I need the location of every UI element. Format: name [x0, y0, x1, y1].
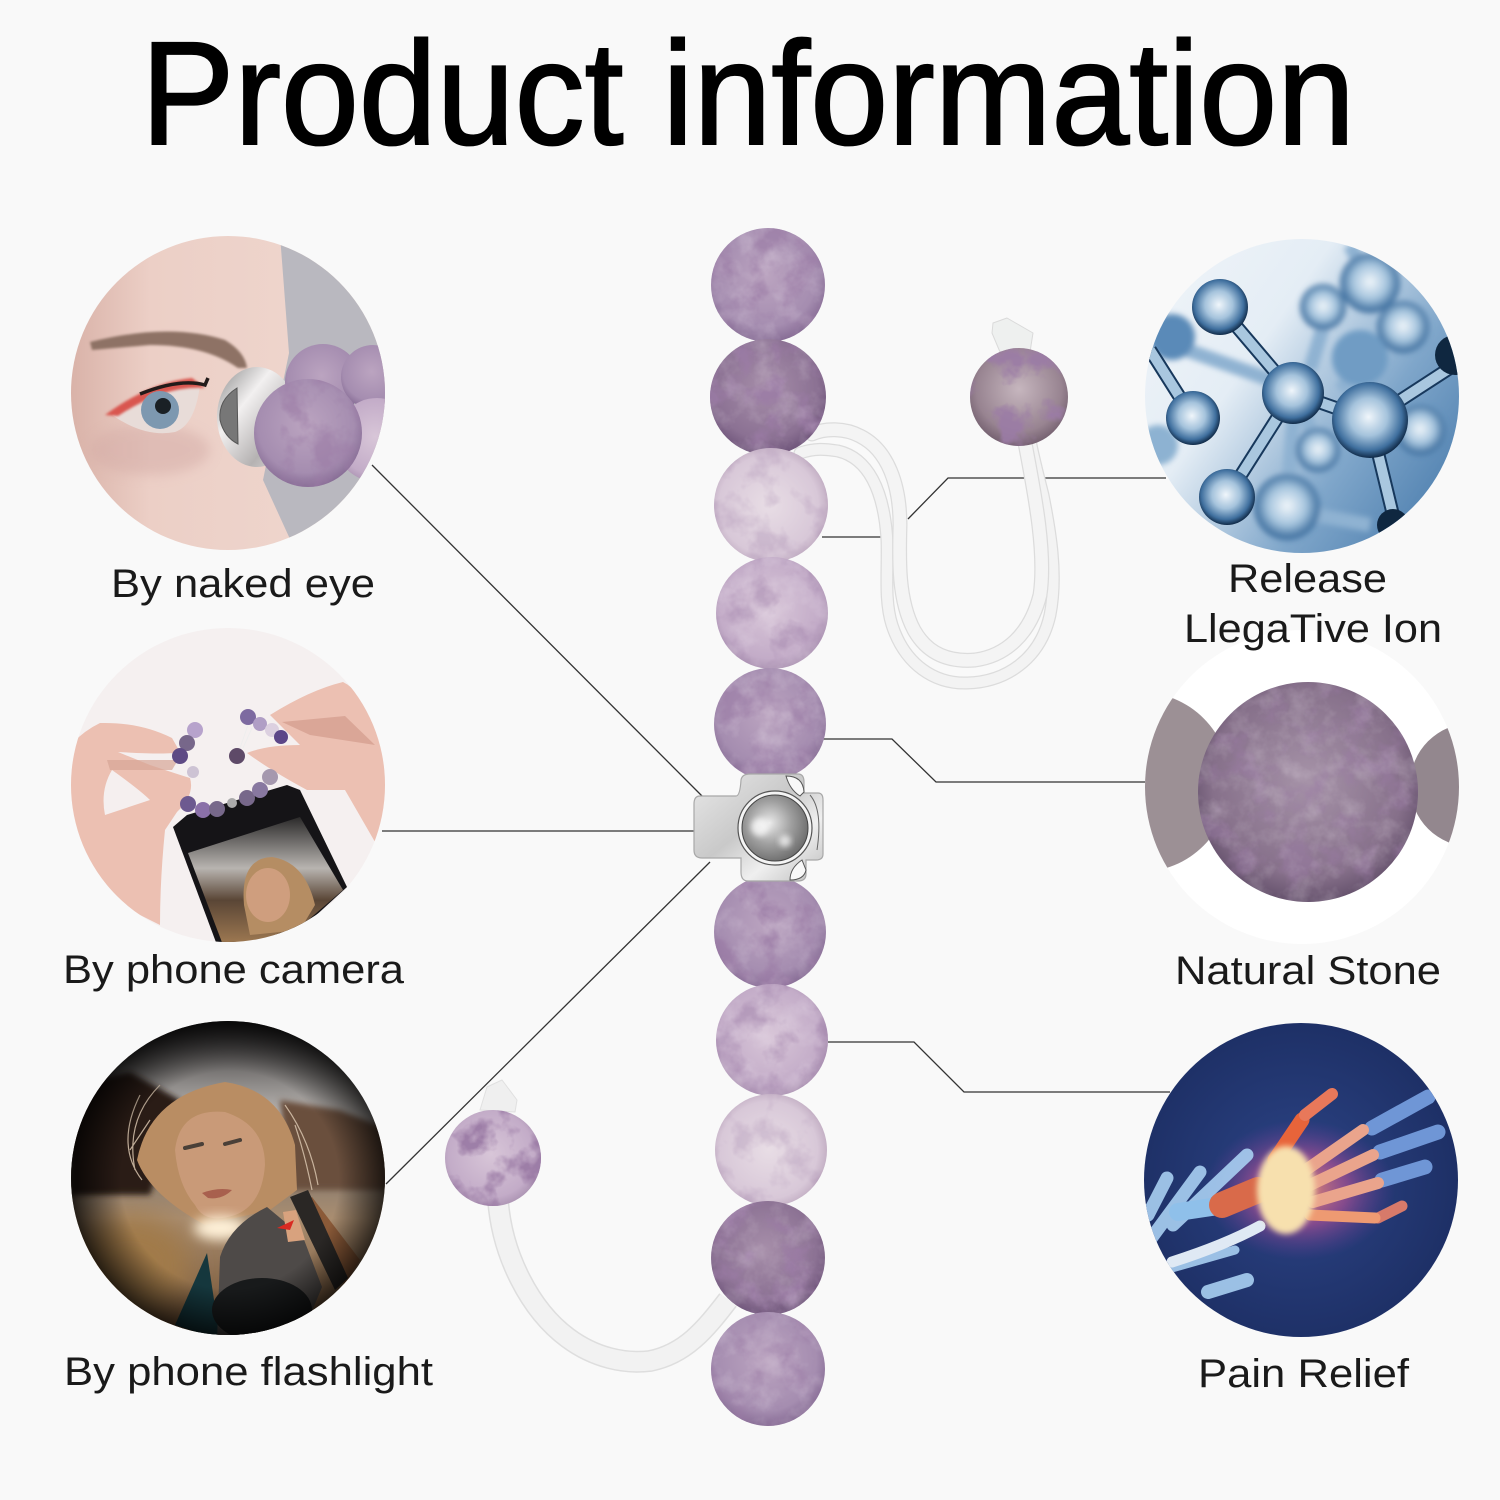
- label: [1184, 557, 1442, 651]
- label: Pain Relief: [1198, 1352, 1410, 1396]
- photo: woman lit by flashlight: [70, 1020, 390, 1342]
- panel: by phone camera: [60, 628, 405, 992]
- title: Product information: [141, 12, 1355, 176]
- elastic cord bottom: [498, 1200, 728, 1362]
- panel: natural stone: [1145, 682, 1459, 984]
- panel: release negative ion: [1138, 238, 1475, 651]
- photo: eye with bracelet charm: [71, 236, 385, 550]
- elastic cord top: [800, 430, 1053, 683]
- label: Release: [1228, 557, 1387, 601]
- loose bead bottom: [445, 1080, 541, 1206]
- label: By phone flashlight: [64, 1350, 433, 1394]
- illustration: x-ray hand: [1144, 1022, 1464, 1342]
- label: Natural Stone: [1175, 949, 1441, 993]
- panel: pain relief: [1144, 1022, 1464, 1396]
- panel: by phone flashlight: [64, 1020, 433, 1394]
- photo: hands holding bracelet over phone: [60, 628, 395, 948]
- label: By phone camera: [63, 948, 405, 992]
- connector lines: [372, 465, 1170, 1184]
- label: By naked eye: [111, 562, 375, 606]
- loose bead top: [970, 318, 1068, 446]
- bracelet strand beads: [710, 228, 828, 1426]
- photo: close-up stone bead: [1145, 682, 1459, 902]
- photo: glass molecule model: [1138, 238, 1475, 558]
- label: LlegaTive Ion: [1184, 607, 1442, 651]
- silver cross charm: [694, 774, 823, 881]
- panel: by naked eye: [71, 236, 385, 606]
